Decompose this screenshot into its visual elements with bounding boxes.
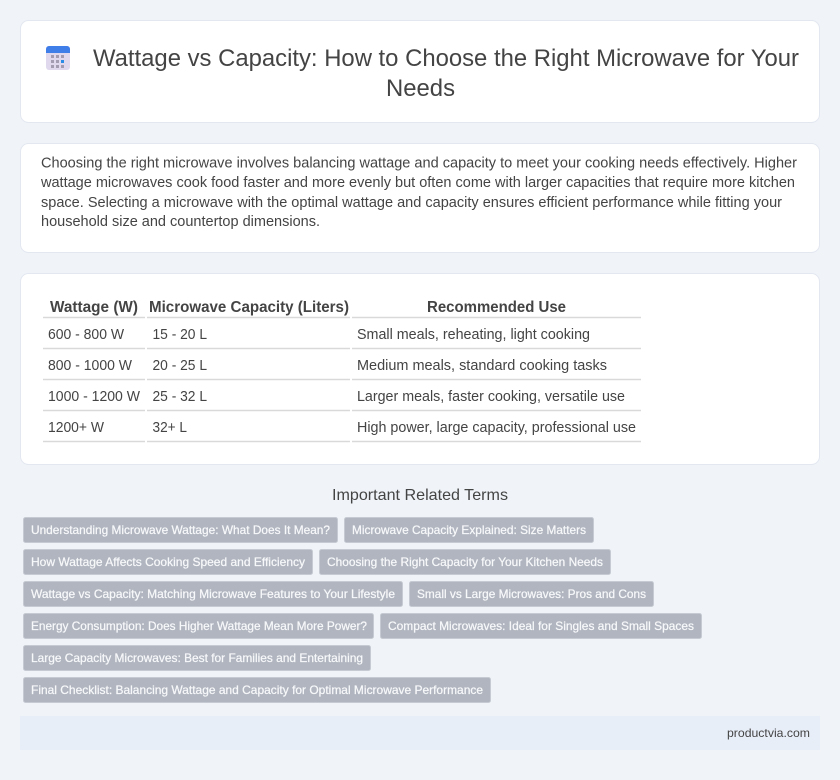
tag: Energy Consumption: Does Higher Wattage Mean More Power? — [31, 619, 367, 633]
tag — [24, 518, 338, 542]
intro paragraph: Choosing the right microwave involves balancing wattage and capacity to meet your cooking needs effectively. Higher — [41, 156, 797, 172]
table row: 1200+ W — [43, 420, 641, 442]
intro paragraph: household size and countertop dimensions. — [41, 214, 320, 230]
panel: comparison table — [20, 274, 820, 464]
tag — [24, 550, 312, 574]
intro paragraph: wattage microwaves cook food faster and more evenly but often come with larger capacities that require more kitchen — [40, 175, 795, 191]
table header — [43, 299, 641, 318]
icon: calendar — [46, 46, 70, 70]
table row: 600 - 800 W: 600 - 800 W — [48, 327, 124, 343]
tag: Wattage vs Capacity: Matching Microwave Features to Your Lifestyle — [31, 587, 395, 601]
table header: Microwave Capacity (Liters) — [149, 299, 349, 316]
title text: Wattage vs Capacity: How to Choose the Right Microwave for Your — [93, 45, 799, 72]
tag: Choosing the Right Capacity for Your Kitchen Needs — [327, 555, 603, 569]
title text — [93, 45, 799, 102]
tag — [24, 678, 490, 702]
table row: 600 - 800 W: 15 - 20 L — [152, 327, 207, 343]
table row: 1000 - 1200 W — [43, 389, 641, 410]
tag — [380, 614, 702, 638]
table row: 600 - 800 W — [43, 327, 641, 348]
heading: related terms: Important Related Terms — [332, 487, 508, 504]
tag: Small vs Large Microwaves: Pros and Cons — [417, 587, 646, 601]
tag — [24, 614, 374, 638]
table header: Recommended Use — [427, 299, 566, 316]
tag — [24, 646, 370, 670]
title text: Needs — [386, 75, 455, 102]
tag: Large Capacity Microwaves: Best for Families and Entertaining — [31, 651, 363, 665]
table row: 1200+ W: 1200+ W — [48, 420, 104, 436]
tag: How Wattage Affects Cooking Speed and Efficiency — [31, 555, 305, 569]
tag: Microwave Capacity Explained: Size Matters — [352, 523, 586, 537]
tag: Understanding Microwave Wattage: What Does It Mean? — [31, 523, 330, 537]
related term tags — [24, 518, 702, 702]
table row: 800 - 1000 W: Medium meals, standard cooking tasks — [357, 358, 607, 374]
tag — [320, 550, 610, 574]
table row: 800 - 1000 W: 800 - 1000 W — [48, 358, 132, 374]
table row: 1000 - 1200 W: 25 - 32 L — [152, 389, 207, 405]
intro paragraph: space. Selecting a microwave with the optimal wattage and capacity ensures efficient performance while fitting your — [41, 195, 782, 211]
tag: Final Checklist: Balancing Wattage and Capacity for Optimal Microwave Performance — [31, 683, 483, 697]
table row: 1200+ W: High power, large capacity, professional use — [357, 420, 636, 436]
tag — [344, 518, 594, 542]
table row: 800 - 1000 W: 20 - 25 L — [152, 358, 207, 374]
panel: title — [20, 20, 820, 122]
tag: Compact Microwaves: Ideal for Singles and Small Spaces — [388, 619, 694, 633]
table header: Wattage (W) — [50, 299, 138, 316]
tag — [24, 582, 402, 606]
table row: 1200+ W: 32+ L — [152, 420, 187, 436]
panel: introduction — [20, 144, 820, 252]
tag — [410, 582, 654, 606]
table row: 1000 - 1200 W: Larger meals, faster cooking, versatile use — [357, 389, 625, 405]
table row: 800 - 1000 W — [43, 358, 641, 380]
footer: productvia.com — [727, 726, 810, 740]
footer — [20, 716, 820, 750]
table row: 1000 - 1200 W: 1000 - 1200 W — [48, 389, 140, 405]
intro paragraph — [40, 156, 797, 230]
table row: 600 - 800 W: Small meals, reheating, light cooking — [357, 327, 590, 343]
